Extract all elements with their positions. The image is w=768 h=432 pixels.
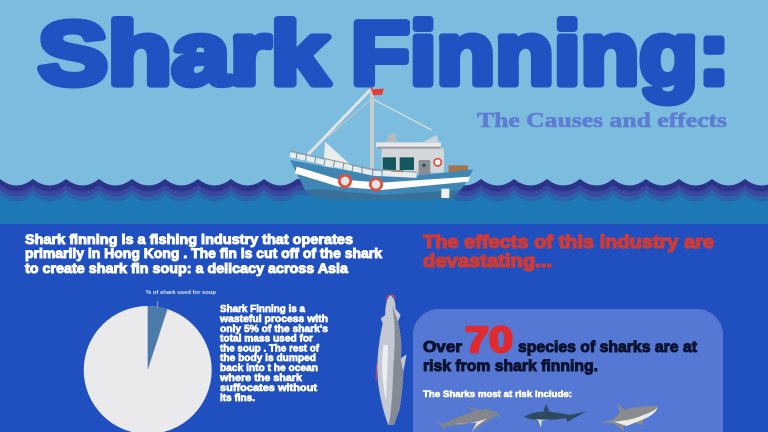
icon: hammerhead shark bbox=[435, 406, 501, 432]
effects heading bbox=[423, 232, 714, 271]
waves bbox=[0, 179, 768, 226]
icon: thresher shark bbox=[524, 404, 587, 429]
pie description text: the soup . The rest of bbox=[220, 344, 320, 354]
panel: lower blue background bbox=[0, 224, 768, 432]
panel: sky background bbox=[0, 0, 768, 200]
railing bbox=[290, 151, 417, 177]
rudder bbox=[441, 189, 449, 198]
pie chart bbox=[84, 290, 216, 432]
species text: Over bbox=[423, 339, 462, 356]
flag bbox=[370, 86, 384, 95]
pie label leader bbox=[157, 301, 158, 308]
big number 70: 70 bbox=[465, 319, 513, 360]
pie description text: total mass used for bbox=[220, 334, 313, 344]
effects heading: The effects of this industry are bbox=[423, 232, 714, 252]
intro text bbox=[25, 231, 382, 276]
shark shading bbox=[388, 305, 403, 425]
pie description text bbox=[219, 304, 328, 404]
hull stripe bbox=[295, 167, 470, 190]
illustration: finned shark bbox=[376, 295, 407, 425]
pie chart label: % of shark used for soup bbox=[146, 290, 216, 296]
title: Shark bbox=[38, 3, 330, 103]
panel: species at risk bbox=[413, 309, 723, 432]
species text: risk from shark finning. bbox=[423, 358, 598, 375]
pie description text: Shark Finning is a bbox=[220, 304, 305, 315]
pie description text: its fins. bbox=[220, 393, 255, 404]
illustration: fishing boat bbox=[290, 86, 473, 200]
species text bbox=[423, 339, 697, 375]
pie description text: the body is dumped bbox=[220, 353, 316, 364]
pie description text: where the shark bbox=[219, 373, 302, 384]
pie description text: suffocates without bbox=[220, 383, 318, 394]
at-risk subheading: The Sharks most at risk include: bbox=[423, 389, 572, 400]
intro text: Shark finning is a fishing industry that operates bbox=[25, 231, 353, 247]
mast and rigging bbox=[307, 88, 432, 170]
pie description text: only 5% of the shark's bbox=[220, 324, 328, 335]
effects heading: devastating... bbox=[423, 251, 552, 271]
intro text: to create shark fin soup: a delicacy across Asia bbox=[25, 260, 348, 276]
icon: reef shark bbox=[602, 403, 658, 432]
hull shading bbox=[305, 189, 460, 200]
pie description text: back into t he ocean bbox=[220, 363, 318, 374]
pie description text: wasteful process with bbox=[219, 314, 328, 325]
title: Finning: bbox=[351, 3, 730, 103]
sail bbox=[323, 142, 353, 167]
life rings bbox=[339, 175, 382, 190]
subtitle: The Causes and effects bbox=[477, 108, 727, 132]
cabin bbox=[376, 133, 468, 176]
shark highlight bbox=[382, 345, 388, 402]
blood marks bbox=[376, 295, 395, 382]
hull bbox=[290, 160, 473, 200]
shark body bbox=[377, 295, 407, 425]
species text: species of sharks are at bbox=[518, 339, 697, 356]
intro text: primarily in Hong Kong . The fin is cut off of the shark bbox=[25, 245, 382, 261]
title bbox=[38, 3, 730, 103]
